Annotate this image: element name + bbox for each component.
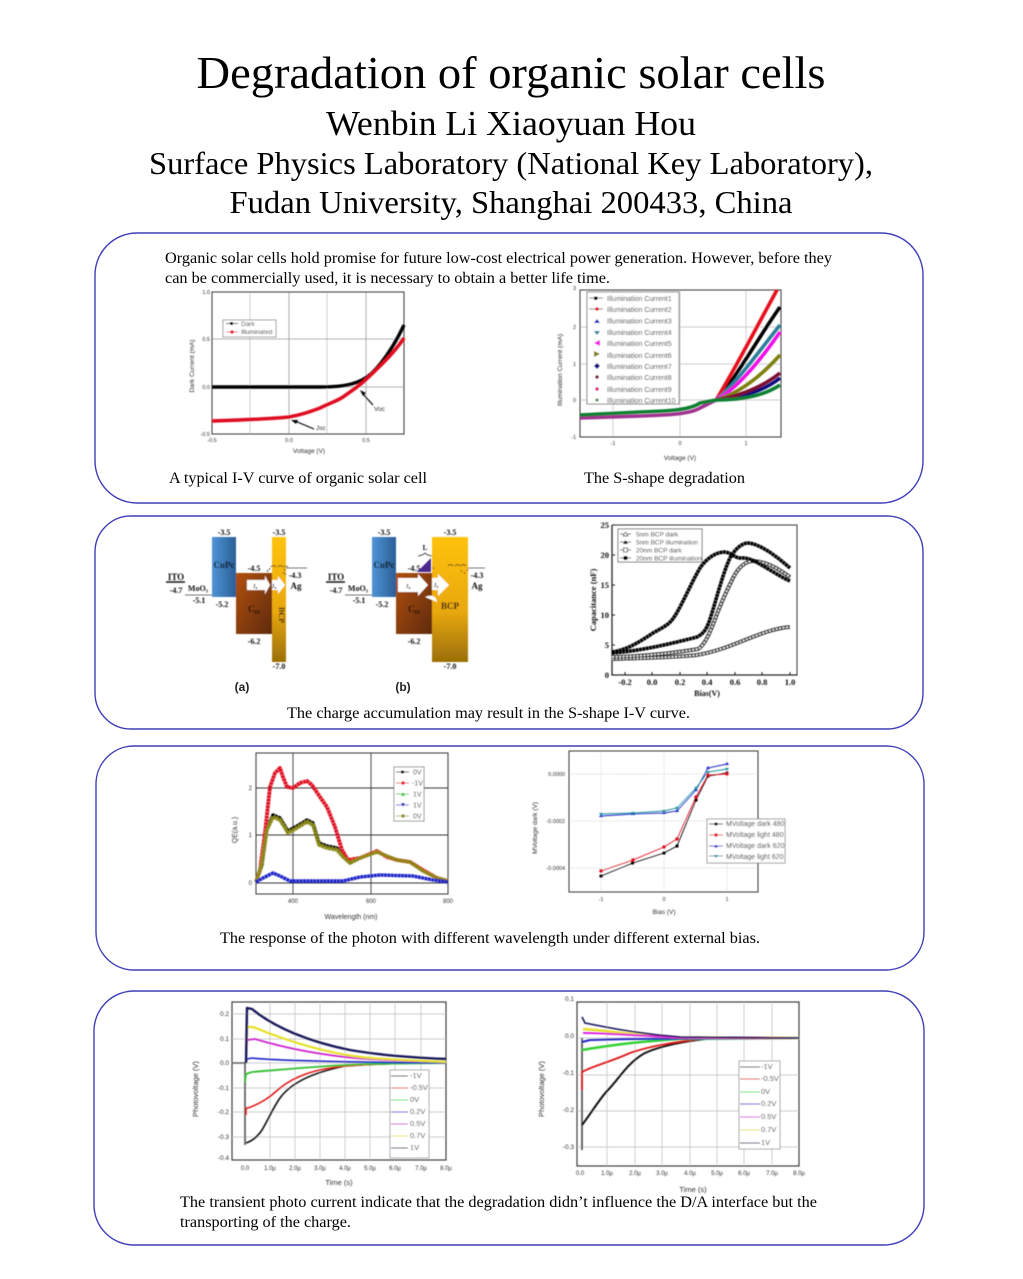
chart: S-shape degradation — [557, 286, 781, 462]
legend: Illumination Current7 — [607, 364, 672, 371]
chart: typical I-V curve: -0.5 — [201, 432, 210, 438]
energy level diagram (a): -3.5 — [218, 528, 230, 537]
chart: photovoltage left: 2.0µ — [289, 1166, 301, 1172]
legend: Illumination Current3 — [607, 318, 672, 326]
chart: photovoltage right: 0.0 — [565, 1033, 574, 1040]
chart: MVoltage vs bias: 0 — [662, 897, 666, 903]
energy level diagram (b): J₀ — [434, 583, 439, 589]
chart: S-shape degradation: 3 — [573, 286, 576, 292]
chart: photovoltage left — [191, 1002, 452, 1187]
chart: capacitance vs bias: 0.0 — [647, 677, 657, 687]
legend: MVoltage light 480 — [726, 832, 784, 839]
chart: photovoltage left: Time (s) — [325, 1178, 353, 1187]
chart: S-shape degradation: -1 — [571, 435, 576, 441]
chart: photovoltage left: -0.1 — [218, 1085, 229, 1092]
energy level diagram (b): C₆₀ — [408, 604, 420, 614]
intro text — [165, 250, 832, 287]
chart: capacitance vs bias: -0.2 — [618, 677, 632, 687]
chart: typical I-V curve — [189, 290, 404, 455]
legend: MVoltage dark 480 — [726, 821, 784, 828]
energy level diagram (a): CuPc — [214, 560, 235, 570]
energy level diagram (a): BCP — [277, 607, 286, 623]
chart: photovoltage right: 2.0µ — [629, 1171, 641, 1177]
legend: -1V — [412, 780, 423, 788]
chart: MVoltage vs bias: Bias (V) — [652, 909, 676, 916]
chart: photovoltage left: 5.0µ — [364, 1166, 376, 1172]
chart: capacitance vs bias: Bias(V) — [694, 689, 720, 698]
chart: MVoltage vs bias: -1 — [599, 897, 603, 903]
legend: Illumination Current2 — [607, 307, 672, 314]
legend: 0.7V — [410, 1131, 425, 1140]
panel: charge accumulation — [95, 516, 923, 729]
annotation arrows: Jsc — [316, 425, 326, 432]
chart: photovoltage left: 4.0µ — [339, 1166, 351, 1172]
legend: 0.5V — [410, 1119, 425, 1128]
affiliation line 1: Surface Physics Laboratory (National Key Laboratory), — [149, 145, 873, 181]
legend: Illumination Current1 — [607, 296, 672, 303]
energy level diagram (a): -5.1 — [193, 596, 205, 605]
chart: S-shape degradation: -1 — [611, 441, 615, 447]
energy level diagram (b): -3.5 — [378, 528, 390, 537]
chart: photovoltage right: 0.0 — [576, 1171, 585, 1177]
chart: photovoltage left: -0.2 — [218, 1109, 229, 1116]
chart: photovoltage right — [537, 996, 805, 1194]
chart: S-shape degradation: 1 — [573, 362, 576, 368]
legend: Illumination Current6 — [607, 353, 672, 360]
legend: MVoltage dark 620 — [726, 843, 784, 850]
chart: MVoltage vs bias: 0.0000 — [548, 772, 565, 778]
energy level diagram (b): -4.5 — [408, 564, 420, 573]
energy level diagram (b): J₀ — [406, 584, 411, 590]
annotation arrows — [291, 390, 386, 432]
chart: S-shape degradation: Voltage (V) — [664, 455, 696, 462]
chart: photovoltage right: 5.0µ — [711, 1171, 723, 1177]
chart: quantum efficiency: Wavelength (nm) — [324, 914, 378, 921]
energy level diagram (a): C₆₀ — [248, 604, 260, 614]
legend: MVoltage light 620 — [726, 854, 784, 861]
chart: photovoltage right: 7.0µ — [766, 1171, 778, 1177]
legend: 0V — [410, 1095, 419, 1104]
energy level diagram (a): -5.2 — [216, 600, 228, 609]
chart: photovoltage right: 4.0µ — [684, 1171, 696, 1177]
intro text: can be commercially used, it is necessary to obtain a better life time. — [165, 270, 610, 287]
chart: capacitance vs bias: 0.4 — [702, 677, 713, 687]
chart: capacitance vs bias: 15 — [600, 580, 609, 590]
chart: S-shape degradation: 0 — [678, 441, 682, 447]
energy level diagram (a): -6.2 — [248, 637, 260, 646]
caption: S-shape: The S-shape degradation — [584, 470, 745, 487]
legend: 20nm BCP illumination — [636, 556, 702, 562]
energy level diagram (b): -6.2 — [408, 637, 420, 646]
chart: typical I-V curve: 0.5 — [202, 337, 210, 343]
energy level diagram (b) — [326, 528, 485, 671]
legend: Illumination Current10 — [607, 398, 676, 405]
chart: photovoltage left: 7.0µ — [415, 1166, 427, 1172]
legend: -1V — [410, 1071, 422, 1080]
chart: quantum efficiency: 800 — [443, 899, 454, 905]
chart: MVoltage vs bias — [532, 751, 785, 916]
chart: typical I-V curve: Voltage (V) — [293, 448, 325, 455]
chart: photovoltage left: 0.0 — [241, 1166, 250, 1172]
chart: S-shape degradation: 2 — [573, 325, 576, 331]
chart: photovoltage right: -0.2 — [563, 1107, 574, 1114]
caption: I-V curve: A typical I-V curve of organic solar cell — [169, 470, 428, 487]
energy level diagram (a): J₀ — [253, 584, 258, 590]
chart: capacitance vs bias: 0.8 — [757, 677, 767, 687]
chart: typical I-V curve: 0.0 — [202, 385, 210, 391]
energy level diagram (b): CuPc — [374, 560, 395, 570]
legend: 20nm BCP dark — [636, 548, 683, 554]
chart: photovoltage left: 0.0 — [220, 1060, 229, 1067]
caption: transient photo current — [180, 1194, 817, 1231]
chart: quantum efficiency — [232, 753, 454, 921]
affiliation line 2: Fudan University, Shanghai 200433, China — [230, 184, 792, 220]
energy level diagram (b): -5.1 — [353, 596, 365, 605]
chart: photovoltage right: Time (s) — [679, 1185, 707, 1194]
energy level diagram (b): Ag — [472, 581, 483, 591]
chart: photovoltage right: 8.0µ — [793, 1171, 805, 1177]
energy level diagram (a): -7.0 — [273, 662, 285, 671]
chart: capacitance vs bias: 10 — [600, 610, 609, 620]
chart: photovoltage left: 0.2 — [220, 1011, 229, 1018]
energy level diagram (b): -7.0 — [444, 662, 456, 671]
chart: quantum efficiency: QE(a.u.) — [232, 817, 239, 843]
chart: capacitance vs bias: 1.0 — [785, 677, 795, 687]
legend: Illumination Current4 — [607, 330, 672, 337]
energy level diagram (b): -4.7 — [330, 586, 342, 595]
legend: 0V — [413, 814, 422, 820]
chart: typical I-V curve: 0.0 — [285, 438, 293, 444]
legend: Illumination Current9 — [607, 387, 672, 394]
energy level diagram (a) — [166, 528, 307, 671]
legend: -0.5V — [410, 1083, 428, 1092]
chart: photovoltage right: 3.0µ — [656, 1171, 668, 1177]
legend: 1V — [413, 802, 422, 810]
legend — [223, 320, 276, 337]
chart: quantum efficiency: 0 — [249, 881, 253, 887]
energy level diagram (b): MoO₃ — [348, 584, 369, 593]
label (a): (a) — [235, 680, 249, 694]
chart: quantum efficiency: 2 — [249, 786, 253, 792]
chart: MVoltage vs bias: -0.0004 — [546, 866, 565, 872]
chart: photovoltage left: 8.0µ — [440, 1166, 452, 1172]
chart: capacitance vs bias: 0.6 — [730, 677, 740, 687]
energy level diagram (a): -4.3 — [289, 571, 301, 580]
chart: quantum efficiency: 1 — [249, 833, 253, 839]
chart: typical I-V curve: Dark Current (mA) — [189, 339, 196, 393]
legend: 0.7V — [761, 1125, 776, 1134]
legend: -0.5V — [761, 1074, 779, 1083]
chart: photovoltage left: -0.3 — [218, 1134, 229, 1141]
energy level diagram (a): J₀ — [272, 584, 277, 590]
energy level diagram (b): -3.5 — [444, 528, 456, 537]
chart: MVoltage vs bias: -0.0002 — [546, 819, 565, 825]
legend — [390, 1070, 429, 1158]
legend — [587, 292, 679, 405]
chart: photovoltage left: 6.0µ — [389, 1166, 401, 1172]
panel: transient photo current — [94, 991, 924, 1245]
legend: Dark — [241, 321, 255, 328]
energy level diagram (b): -5.2 — [376, 600, 388, 609]
chart: capacitance vs bias: Capacitance (nF) — [588, 569, 598, 631]
chart: typical I-V curve: 1.0 — [202, 290, 210, 296]
authors: Wenbin Li Xiaoyuan Hou — [326, 104, 696, 143]
chart: capacitance vs bias: 0 — [605, 670, 609, 680]
title: Degradation of organic solar cells — [196, 47, 826, 98]
chart: photovoltage right: -0.3 — [563, 1144, 574, 1151]
chart: capacitance vs bias: 0.2 — [675, 677, 685, 687]
energy level diagram (a): -4.7 — [170, 586, 182, 595]
energy level diagram (a): Ag — [290, 581, 302, 591]
legend: 5nm BCP illumination — [636, 540, 698, 546]
energy level diagram (b): BCP — [441, 601, 460, 611]
chart: S-shape degradation: 1 — [744, 441, 748, 447]
energy level diagram (b): -4.3 — [471, 571, 483, 580]
chart: capacitance vs bias: 20 — [600, 550, 609, 560]
chart: MVoltage vs bias: 1 — [725, 897, 729, 903]
legend: 1V — [761, 1138, 770, 1147]
chart: photovoltage right: 0.1 — [565, 996, 574, 1003]
caption: photon response: The response of the photon with different wavelength under different external bias. — [220, 930, 760, 947]
legend: 0.5V — [761, 1112, 776, 1121]
chart: photovoltage left: 1.0µ — [264, 1166, 276, 1172]
energy level diagram (a): MoO₃ — [188, 584, 209, 593]
legend: 0V — [413, 770, 422, 776]
chart: capacitance vs bias: 5 — [605, 640, 609, 650]
energy level diagram (a): -3.5 — [273, 528, 285, 537]
intro text: Organic solar cells hold promise for future low-cost electrical power generation. However, before they — [165, 250, 832, 267]
energy level diagram (a): ITO — [168, 572, 184, 582]
chart: typical I-V curve: -0.5 — [207, 438, 217, 444]
label (b): (b) — [395, 680, 411, 694]
chart: quantum efficiency: 600 — [366, 899, 377, 905]
panel: photon response — [96, 746, 924, 970]
legend — [739, 1061, 780, 1149]
chart: photovoltage left: 0.1 — [220, 1036, 229, 1043]
legend: 0V — [761, 1087, 770, 1096]
chart: photovoltage right: Photovoltage (V) — [537, 1061, 546, 1117]
legend: 0.2V — [761, 1099, 776, 1108]
chart: photovoltage right: 1.0µ — [601, 1171, 613, 1177]
legend — [618, 529, 702, 562]
legend: Illumination Current8 — [607, 375, 672, 382]
annotation arrows: Voc — [374, 406, 386, 413]
energy level diagram (a): -4.5 — [248, 564, 260, 573]
chart: photovoltage left: -0.4 — [218, 1155, 229, 1162]
chart: capacitance vs bias: 25 — [600, 520, 609, 530]
legend: 1V — [413, 792, 422, 798]
panel: introduction and I-V curves — [95, 233, 923, 503]
legend: 0.2V — [410, 1107, 425, 1116]
caption: charge accumulation: The charge accumulation may result in the S-shape I-V curve. — [287, 705, 690, 722]
chart: photovoltage right: -0.1 — [563, 1070, 574, 1077]
chart: S-shape degradation: Illumination Current (mA) — [557, 334, 564, 406]
chart: quantum efficiency: 400 — [288, 899, 299, 905]
chart: photovoltage left: 3.0µ — [314, 1166, 326, 1172]
legend — [394, 767, 424, 821]
chart: photovoltage left: Photovoltage (V) — [191, 1061, 200, 1117]
legend: Illumination Current5 — [607, 341, 672, 348]
chart: capacitance vs bias — [588, 520, 797, 698]
legend: -1V — [761, 1062, 773, 1071]
chart: photovoltage right: 6.0µ — [738, 1171, 750, 1177]
legend: 1V — [410, 1143, 419, 1152]
legend — [707, 819, 785, 863]
caption: transient photo current: transporting of the charge. — [180, 1214, 351, 1231]
energy level diagram (b): L — [423, 544, 428, 552]
chart: MVoltage vs bias: MVoltage dark (V) — [532, 802, 539, 854]
legend: 5nm BCP dark — [636, 532, 679, 538]
chart: typical I-V curve: 0.5 — [362, 438, 370, 444]
energy level diagram (b): ITO — [328, 572, 344, 582]
caption: transient photo current: The transient photo current indicate that the degradation didn’t influence the D/A interface but the — [180, 1194, 817, 1211]
legend: Illuminated — [241, 329, 273, 336]
chart: S-shape degradation: 0 — [573, 398, 576, 404]
